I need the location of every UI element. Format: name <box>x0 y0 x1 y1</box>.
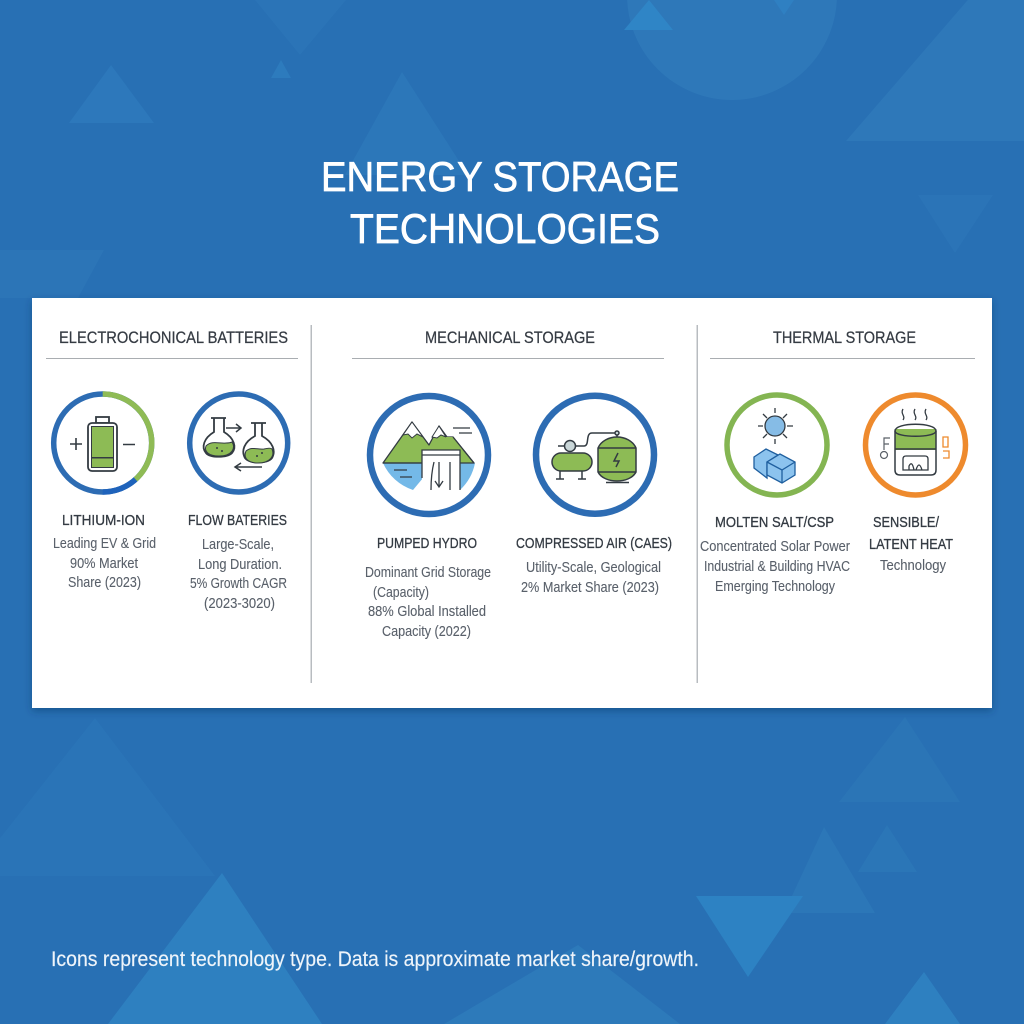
text: sensible and latent heat <box>869 514 953 574</box>
text: pumped hydro: Capacity (2022) <box>382 623 471 640</box>
icon: pumped hydro <box>370 396 488 514</box>
text: pumped hydro: Dominant Grid Storage <box>365 564 491 581</box>
panel: electrochemical batteries <box>46 328 298 612</box>
text: compressed air: COMPRESSED AIR (CAES) <box>516 535 672 552</box>
heading: mechanical storage: MECHANICAL STORAGE <box>425 328 595 347</box>
text: lithium-ion <box>53 512 156 591</box>
text: molten salt <box>700 514 850 595</box>
panel: thermal storage <box>700 328 975 595</box>
icon: molten salt <box>727 395 827 495</box>
panel: main card <box>32 298 992 708</box>
title: ENERGY STORAGE <box>321 153 679 200</box>
text: lithium-ion: LITHIUM-ION <box>62 512 145 529</box>
icon: flow batteries <box>190 394 288 492</box>
text: pumped hydro: (Capacity) <box>373 584 429 601</box>
heading: electrochonical batteries: ELECTROCHONICAL BATTERIES <box>59 328 288 347</box>
text: sensible and latent heat: SENSIBLE/ <box>873 514 940 531</box>
text: pumped hydro: 88% Global Installed <box>368 603 486 620</box>
text: pumped hydro: PUMPED HYDRO <box>377 535 477 552</box>
text: pumped hydro <box>365 535 491 640</box>
text: lithium-ion: Leading EV & Grid <box>53 535 156 552</box>
text: compressed air: Utility-Scale, Geological <box>526 559 661 576</box>
text: flow batteries: FLOW BATERIES <box>188 512 287 529</box>
heading: thermal storage: THERMAL STORAGE <box>773 328 916 347</box>
text: compressed air <box>516 535 672 596</box>
text: molten salt: Industrial & Building HVAC <box>704 558 850 575</box>
title <box>321 153 679 252</box>
icon: lithium-ion battery <box>54 394 152 492</box>
text: sensible and latent heat: LATENT HEAT <box>869 536 953 553</box>
text: molten salt: MOLTEN SALT/CSP <box>715 514 834 531</box>
icon: sensible and latent heat <box>866 395 966 495</box>
text: flow batteries: Large-Scale, <box>202 536 274 553</box>
text: flow batteries: Long Duration. <box>198 556 282 573</box>
text: lithium-ion: Share (2023) <box>68 574 141 591</box>
text: molten salt: Concentrated Solar Power <box>700 538 850 555</box>
text: flow batteries: (2023-3020) <box>204 595 275 612</box>
text: molten salt: Emerging Technology <box>715 578 835 595</box>
title: TECHNOLOGIES <box>350 205 660 252</box>
text: compressed air: 2% Market Share (2023) <box>521 579 659 596</box>
text: sensible and latent heat: Technology <box>880 557 946 574</box>
footer note: Icons represent technology type. Data is approximate market share/growth. <box>51 948 699 971</box>
panel: mechanical storage <box>352 328 672 640</box>
text: lithium-ion: 90% Market <box>70 555 139 572</box>
icon: compressed air <box>536 396 654 514</box>
text: flow batteries: 5% Growth CAGR <box>190 575 287 592</box>
text: flow batteries <box>188 512 287 612</box>
